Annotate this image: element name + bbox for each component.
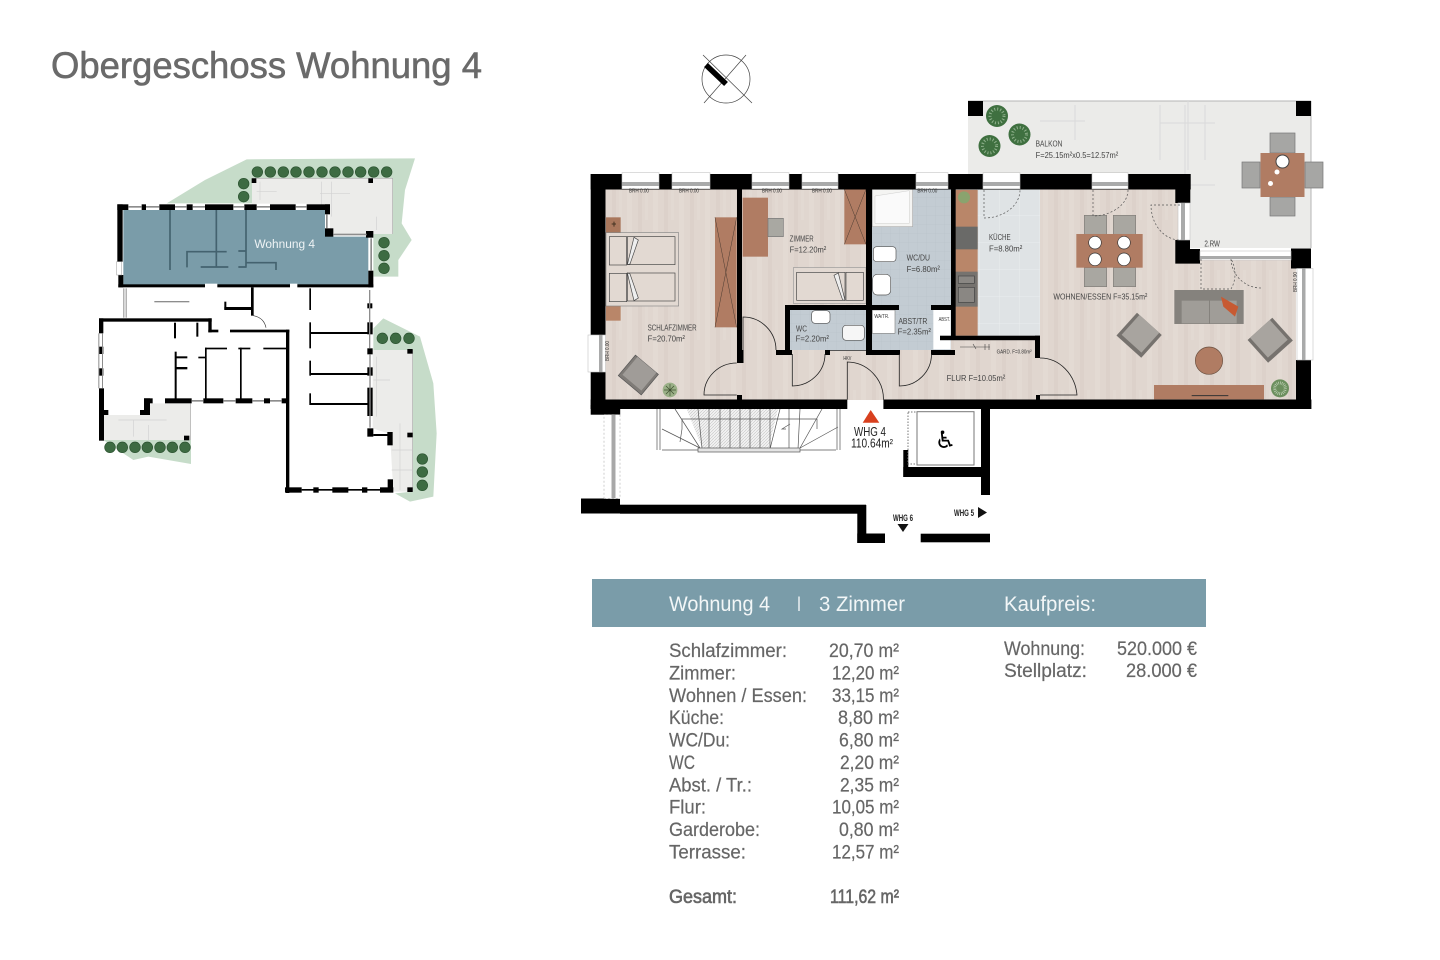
- stairwell and core: [581, 405, 990, 543]
- stair window: [604, 415, 620, 499]
- icon: red entrance triangle: [863, 410, 879, 423]
- room area list: Wohnen / Essen:: [669, 686, 807, 707]
- table header band: Wohnung 4: [669, 593, 770, 616]
- label: WHG 6: [893, 513, 913, 532]
- balcony plants: [978, 105, 1030, 157]
- table header band: I: [797, 593, 801, 616]
- room labels: KÜCHE: [989, 232, 1011, 242]
- room labels: F=25.15m²x0.5=12.57m²: [1036, 150, 1118, 160]
- furniture: bedroom: [606, 217, 737, 397]
- room area list: [669, 641, 899, 908]
- room area list: 12,57 m²: [832, 842, 899, 864]
- room labels: WOHNEN/ESSEN F=35.15m²: [1053, 292, 1147, 302]
- room area list: 8,80 m²: [838, 708, 899, 729]
- room area list: 33,15 m²: [832, 686, 899, 707]
- room area list: Terrasse:: [669, 842, 746, 864]
- room labels: F=2.35m²: [898, 327, 931, 337]
- total row: [669, 887, 899, 908]
- room area list: Zimmer:: [669, 664, 736, 684]
- balcony table and chairs: [1242, 133, 1323, 216]
- room labels: F=6.80m²: [907, 264, 940, 274]
- door swings: [704, 317, 1077, 400]
- floor: kitchen tile: [977, 188, 1040, 336]
- room labels: ABST.: [939, 317, 950, 323]
- room area list: Garderobe:: [669, 820, 760, 841]
- furniture: living and dining: [1076, 215, 1293, 399]
- room area list: Küche:: [669, 708, 724, 729]
- site plan: building overview: [98, 158, 437, 502]
- purchase price list: 28.000 €: [1126, 661, 1197, 682]
- terraces: [103, 178, 413, 492]
- purchase price list: Stellplatz:: [1004, 661, 1087, 682]
- room labels: BRH 0.00: [605, 341, 611, 361]
- room labels: BRH 0.00: [762, 188, 782, 194]
- room labels: F=8.80m²: [989, 243, 1022, 253]
- purchase price list: [1004, 639, 1197, 682]
- room labels: ABST/TR: [898, 316, 927, 326]
- room area list: 0,80 m²: [839, 820, 899, 841]
- total row: Gesamt:: [669, 887, 737, 908]
- room labels: 2.RW: [1204, 238, 1221, 248]
- table header band: [592, 579, 1206, 627]
- highlighted apartment 4: [123, 210, 368, 285]
- furniture: kitchen counter: [956, 190, 978, 336]
- room labels: WA/TR.: [874, 314, 889, 320]
- building walls: [99, 178, 413, 493]
- room labels: WC/DU: [907, 253, 930, 263]
- room labels: GARD. F=0.80m²: [997, 349, 1032, 355]
- balcony door swings, dashed: [984, 190, 1261, 289]
- icon: wheelchair: ♿: [935, 426, 956, 454]
- room labels: BRH 0.00: [629, 188, 649, 194]
- room labels: BRH 0.00: [917, 188, 937, 194]
- room labels: F=12.20m²: [790, 245, 826, 255]
- room area list: 10,05 m²: [832, 798, 899, 818]
- floor: wood: [605, 188, 1296, 400]
- room labels: BRH 0.00: [812, 188, 832, 194]
- room labels: [605, 139, 1299, 383]
- room labels: WC: [796, 323, 807, 333]
- room area list: WC/Du:: [669, 730, 730, 752]
- room labels: BRH 0.00: [679, 188, 699, 194]
- label: WHG 4 area: [851, 424, 894, 450]
- table header band: Kaufpreis:: [1004, 593, 1096, 616]
- furniture: room: [743, 189, 866, 303]
- room labels: FLUR F=10.05m²: [947, 373, 1005, 383]
- furniture: bathroom fixtures: [812, 189, 951, 349]
- room area list: 6,80 m²: [839, 730, 899, 752]
- room labels: F=20.70m²: [648, 333, 685, 343]
- room labels: F=2.20m²: [796, 333, 829, 343]
- walls below apartment: [581, 405, 990, 543]
- room labels: SCHLAFZIMMER: [648, 323, 697, 333]
- label: WHG 5: WHG 5: [954, 508, 974, 518]
- label: WHG 6: WHG 6: [893, 513, 913, 523]
- room labels: HKV: [843, 356, 852, 362]
- label: WHG 4 area: WHG 4: [854, 424, 886, 439]
- title: Obergeschoss Wohnung 4: [51, 45, 482, 86]
- room labels: BRH 0.90: [1293, 272, 1299, 292]
- walls: main apartment structure: [591, 174, 1311, 409]
- wardrobe symbol in hallway: [960, 344, 990, 350]
- garden areas: [103, 158, 437, 502]
- room area list: 2,20 m²: [840, 753, 899, 774]
- balcony floor: [968, 100, 1323, 248]
- room area list: 20,70 m²: [829, 641, 899, 662]
- lift shaft: [908, 412, 974, 465]
- room area list: 12,20 m²: [832, 664, 899, 684]
- purchase price list: 520.000 €: [1117, 639, 1197, 660]
- label: Wohnung 4: Wohnung 4: [254, 237, 315, 251]
- room labels: BALKON: [1036, 139, 1062, 149]
- staircase: [657, 409, 840, 452]
- floor: bath tile: [790, 188, 951, 350]
- windows: [588, 173, 1313, 372]
- label: WHG 4 area: 110.64m²: [851, 436, 894, 450]
- trees: [105, 167, 428, 491]
- room labels: ZIMMER: [790, 234, 814, 244]
- apartment 4 interior walls: [170, 210, 276, 270]
- room area list: WC: [669, 753, 695, 774]
- icon: compass north arrow: [702, 55, 752, 103]
- floor plan: apartment 4: [588, 100, 1323, 409]
- table header band: 3 Zimmer: [819, 593, 905, 616]
- room area list: Flur:: [669, 798, 706, 818]
- wall openings and windows: [98, 204, 372, 428]
- purchase price list: Wohnung:: [1004, 639, 1085, 660]
- room area list: 2,35 m²: [840, 776, 899, 796]
- room area list: Abst. / Tr.:: [669, 776, 752, 796]
- room area list: Schlafzimmer:: [669, 641, 787, 662]
- total row: 111,62 m²: [830, 887, 899, 908]
